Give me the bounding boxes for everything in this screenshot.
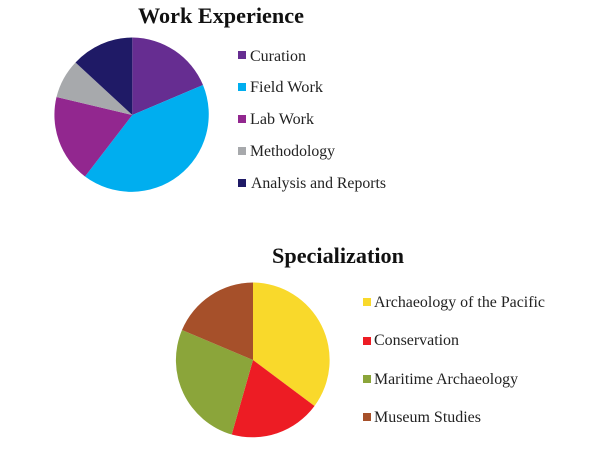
- legend: Work Experience: Analysis and Reports: [251, 175, 386, 192]
- legend: Specialization: Archaeology of the Pacific: [374, 294, 545, 311]
- pie chart: Specialization: [176, 282, 330, 437]
- legend: Work Experience: Methodology: [250, 143, 335, 160]
- legend: Specialization: Maritime Archaeology: [374, 371, 518, 388]
- title: Work Experience: Work Experience: [138, 3, 304, 28]
- legend: Work Experience: Lab Work: [250, 111, 314, 128]
- pie chart: Work Experience: [54, 38, 209, 192]
- legend: Work Experience: [238, 48, 386, 192]
- title: Specialization: Specialization: [272, 243, 404, 268]
- legend: Work Experience: Curation: [250, 48, 306, 65]
- legend: Specialization: Museum Studies: [374, 409, 481, 426]
- legend: Specialization: Conservation: [374, 332, 459, 349]
- legend: Specialization: [363, 294, 545, 426]
- legend: Work Experience: Field Work: [250, 79, 323, 96]
